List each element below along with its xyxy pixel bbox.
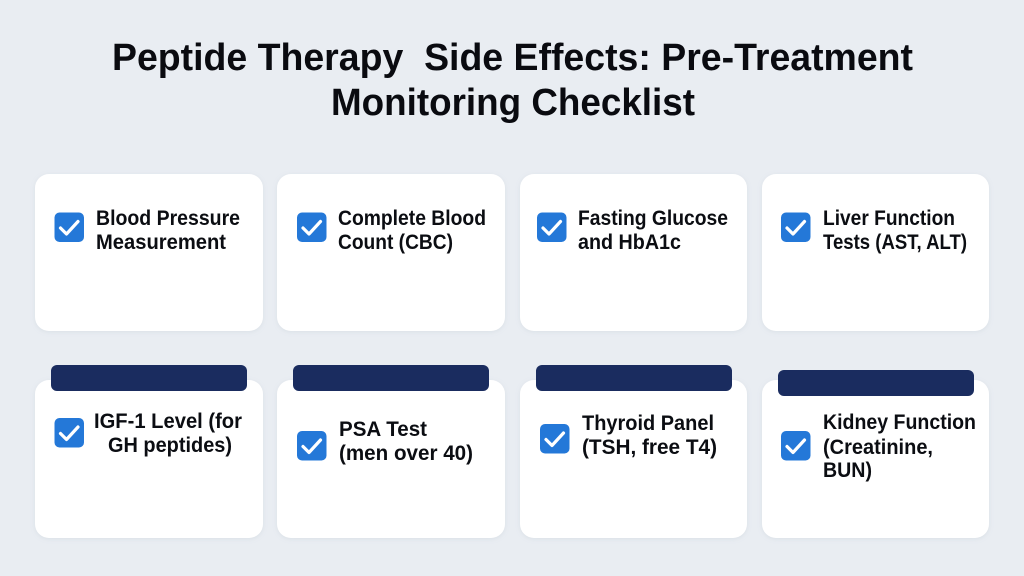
label: blood pressure: Measurement xyxy=(96,230,226,254)
header bar xyxy=(51,365,247,391)
label: psa test xyxy=(339,417,473,465)
panel: blood pressure xyxy=(35,174,263,331)
label: complete blood count: Complete Blood xyxy=(338,206,486,230)
icon: checkbox xyxy=(537,212,566,242)
title: Monitoring Checklist xyxy=(331,82,695,124)
header bar xyxy=(778,370,974,396)
icon: checkbox xyxy=(781,212,810,242)
header bar xyxy=(536,365,732,391)
label: kidney function: (Creatinine, xyxy=(823,435,933,459)
label: igf-1 level xyxy=(94,409,243,457)
label: thyroid panel: (TSH, free T4) xyxy=(582,435,717,459)
icon: checkbox xyxy=(54,418,84,448)
label: igf-1 level: GH peptides) xyxy=(108,433,232,457)
icon: checkbox xyxy=(54,212,84,242)
label: igf-1 level: IGF-1 Level (for xyxy=(94,409,243,433)
label: kidney function: BUN) xyxy=(823,458,872,482)
label: kidney function xyxy=(823,410,976,482)
icon: checkbox xyxy=(540,424,570,454)
label: liver function xyxy=(823,206,967,254)
label: liver function: Liver Function xyxy=(823,206,955,230)
label: liver function: Tests (AST, ALT) xyxy=(823,230,967,254)
panel: thyroid panel xyxy=(520,365,747,538)
icon: checkbox xyxy=(297,212,326,242)
label: fasting glucose: Fasting Glucose xyxy=(578,206,728,230)
panel: liver function xyxy=(762,174,989,331)
panel: igf-1 level xyxy=(35,365,263,538)
icon: checkbox xyxy=(297,431,326,460)
label: complete blood count: Count (CBC) xyxy=(338,230,453,254)
header bar xyxy=(293,365,489,391)
label: kidney function: Kidney Function xyxy=(823,410,976,434)
panel: complete blood count xyxy=(277,174,505,331)
label: fasting glucose: and HbA1c xyxy=(578,230,681,254)
title xyxy=(112,37,913,124)
label: thyroid panel xyxy=(582,411,717,459)
panel: fasting glucose xyxy=(520,174,747,331)
label: psa test: PSA Test xyxy=(339,417,427,441)
label: fasting glucose xyxy=(578,206,728,254)
label: thyroid panel: Thyroid Panel xyxy=(582,411,714,435)
panel: kidney function xyxy=(762,370,989,538)
panel: psa test xyxy=(277,365,505,538)
label: blood pressure: Blood Pressure xyxy=(96,206,240,230)
title: Peptide Therapy Side Effects: Pre-Treatment xyxy=(112,37,913,79)
label: psa test: (men over 40) xyxy=(339,441,473,465)
icon: checkbox xyxy=(781,431,810,460)
label: complete blood count xyxy=(338,206,486,254)
label: blood pressure xyxy=(96,206,240,254)
